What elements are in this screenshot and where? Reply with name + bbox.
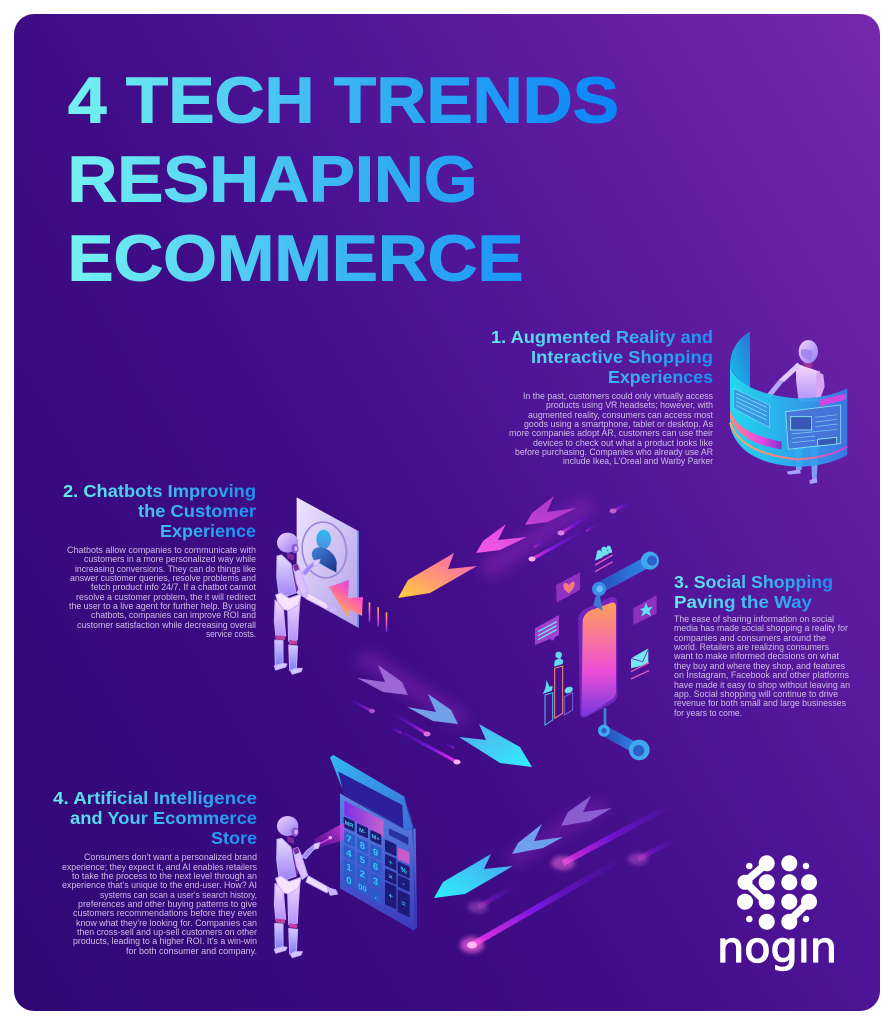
title: ECOMMERCE [68,222,524,295]
body text: section 2: increasing conversions. They can do things like [75,563,256,574]
illustration: robot with calculator: MR [345,820,354,830]
body text: section 1: goods using a smartphone, tablet or desktop. As [524,418,713,429]
illustration: phone with robotic arms and social icons [535,546,659,760]
body text: section 3: for years to come. [674,707,742,718]
heading: section 4: and Your Ecommerce [70,808,257,828]
title [68,64,619,295]
arrows: purple to cyan chevrons [350,650,532,767]
body text: section 2 [67,544,256,639]
body text: section 1: more companies adopt AR, customers can use their [509,427,713,438]
body text: section 1: products using VR headsets; however, with [546,399,713,410]
panel: chatbots [63,481,387,674]
title: RESHAPING [68,143,478,216]
heading: section 1: 1. Augmented Reality and [491,327,713,347]
body text: section 1: devices to check out what a product looks like [533,437,713,448]
logo: nogin [717,855,837,972]
illustration: robot with curved AR screen [730,332,847,484]
heading: section 1 [491,327,713,387]
heading: section 3 [674,572,833,612]
illustration: robot with calculator: 00 [358,882,367,894]
body text: section 3: have made it easy to shop without leaving an [674,679,850,690]
illustration: robot with profile panel [274,497,387,674]
body text: section 2: Chatbots allow companies to communicate with [67,544,256,555]
body text: section 2: service costs. [206,628,256,639]
heading: section 1: Interactive Shopping [531,347,713,367]
logo mark [737,855,817,930]
heading: section 2: the Customer [138,501,256,521]
body text: section 3: on Instagram, Facebook and other platforms [674,669,849,680]
illustration: robot with calculator: % [400,865,407,876]
illustration: robot with calculator: 5 [360,854,365,867]
panel: augmented reality [491,327,847,484]
body text: section 1: augmented reality, consumers can access most [528,409,713,420]
body text: section 4: products, leading to a higher ROI. It's a win-win [73,935,257,946]
illustration: robot with calculator: 8 [360,840,365,853]
title: 4 TECH TRENDS [68,64,619,137]
body text: section 4 [62,851,257,956]
body text: section 1 [509,390,713,466]
body text: section 4: systems can scan a user's search history, [100,889,257,900]
body text: section 2: customer satisfaction while decreasing overall [77,619,256,630]
heading: section 4: 4. Artificial Intelligence [53,788,257,808]
body text: section 2: answer customer queries, resolve problems and [70,572,256,583]
body text: section 4: customers recommendations before they even [73,907,257,918]
heading: section 3: 3. Social Shopping [674,572,833,592]
illustration: robot with calculator: + [389,891,393,901]
body text: section 3 [673,613,850,718]
illustration: robot with calculator: M+ [372,834,380,843]
body text: section 3: companies and consumers around the [674,632,826,643]
body text: section 2: the user to a live agent for further help. By using [69,600,256,611]
heading: section 1: Experiences [608,367,713,387]
body text: section 3: app. Social shopping will continue to drive [674,688,838,699]
body text: section 3: The ease of sharing information on social [674,613,834,624]
illustration: robot with calculator: 9 [373,847,379,860]
illustration: robot with calculator: - [402,879,405,889]
body text: section 4: experience that's unique to the end-user. How? AI [62,879,257,890]
body text: section 4: Consumers don't want a personalized brand [84,851,257,862]
illustration: robot with calculator: 6 [373,861,379,874]
illustration: robot with calculator: 4 [346,848,352,861]
heading: section 2: 2. Chatbots Improving [63,481,256,501]
heading: section 4 [53,788,257,848]
body text: section 2: customers in a more personalized way while [84,553,256,564]
body text: section 4: preferences and other buying patterns to give [78,898,257,909]
body text: section 3: media has made social shopping a reality for [674,622,848,633]
arrows: cyan to purple chevrons [434,796,677,953]
illustration: robot with calculator: ÷ [389,857,393,868]
illustration: robot with calculator: 3 [373,876,379,889]
body text: section 4: then cross-sell and up-sell customers on other [77,926,257,937]
body text: section 1: In the past, customers could only virtually access [523,390,713,401]
body text: section 1: include Ikea, L'Oreal and Warby Parker [563,455,713,466]
illustration: robot with calculator: × [389,872,393,882]
illustration: robot with calculator: M- [359,827,366,836]
panel: social shopping [535,546,850,760]
heading: section 2: Experience [160,521,256,541]
panel: artificial intelligence [53,755,417,958]
body text: section 2: resolve a customer problem, the it will redirect [76,591,256,602]
logo wordmark: nogin [717,923,837,972]
body text: section 2: fetch product info 24/7. If a chatbot cannot [91,581,256,592]
body text: section 3: world. Retailers are realizing consumers [673,641,829,652]
body text: section 4: to take the process to the next level through an [72,870,257,881]
body text: section 1: before purchasing. Companies who already use AR [515,446,713,457]
body text: section 3: they buy and where they shop, and features [674,660,845,671]
heading: section 3: Paving the Way [674,592,812,612]
arrows: orange to magenta chevrons [398,496,632,598]
illustration: robot with calculator: 0 [346,875,352,888]
body text: section 4: for both consumer and company. [126,945,257,956]
body text: section 3: want to make informed decisions on what [673,650,839,661]
illustration: robot with calculator: . [374,891,377,902]
body text: section 2: chatbots, companies can improve ROI and [91,609,256,620]
body text: section 4: experience; they expect it, and AI enables retailers [62,861,257,872]
heading: section 2 [63,481,256,541]
illustration: robot with calculator [274,755,417,958]
heading: section 4: Store [211,828,257,848]
illustration: robot with calculator: = [402,898,406,909]
body text: section 4: know what they're looking for. Companies can [76,917,257,928]
illustration: robot with calculator: 1 [346,862,352,875]
body text: section 3: revenue for both small and large businesses [674,697,846,708]
illustration: robot with calculator: 2 [360,868,365,881]
illustration: robot with calculator: 7 [346,833,352,846]
